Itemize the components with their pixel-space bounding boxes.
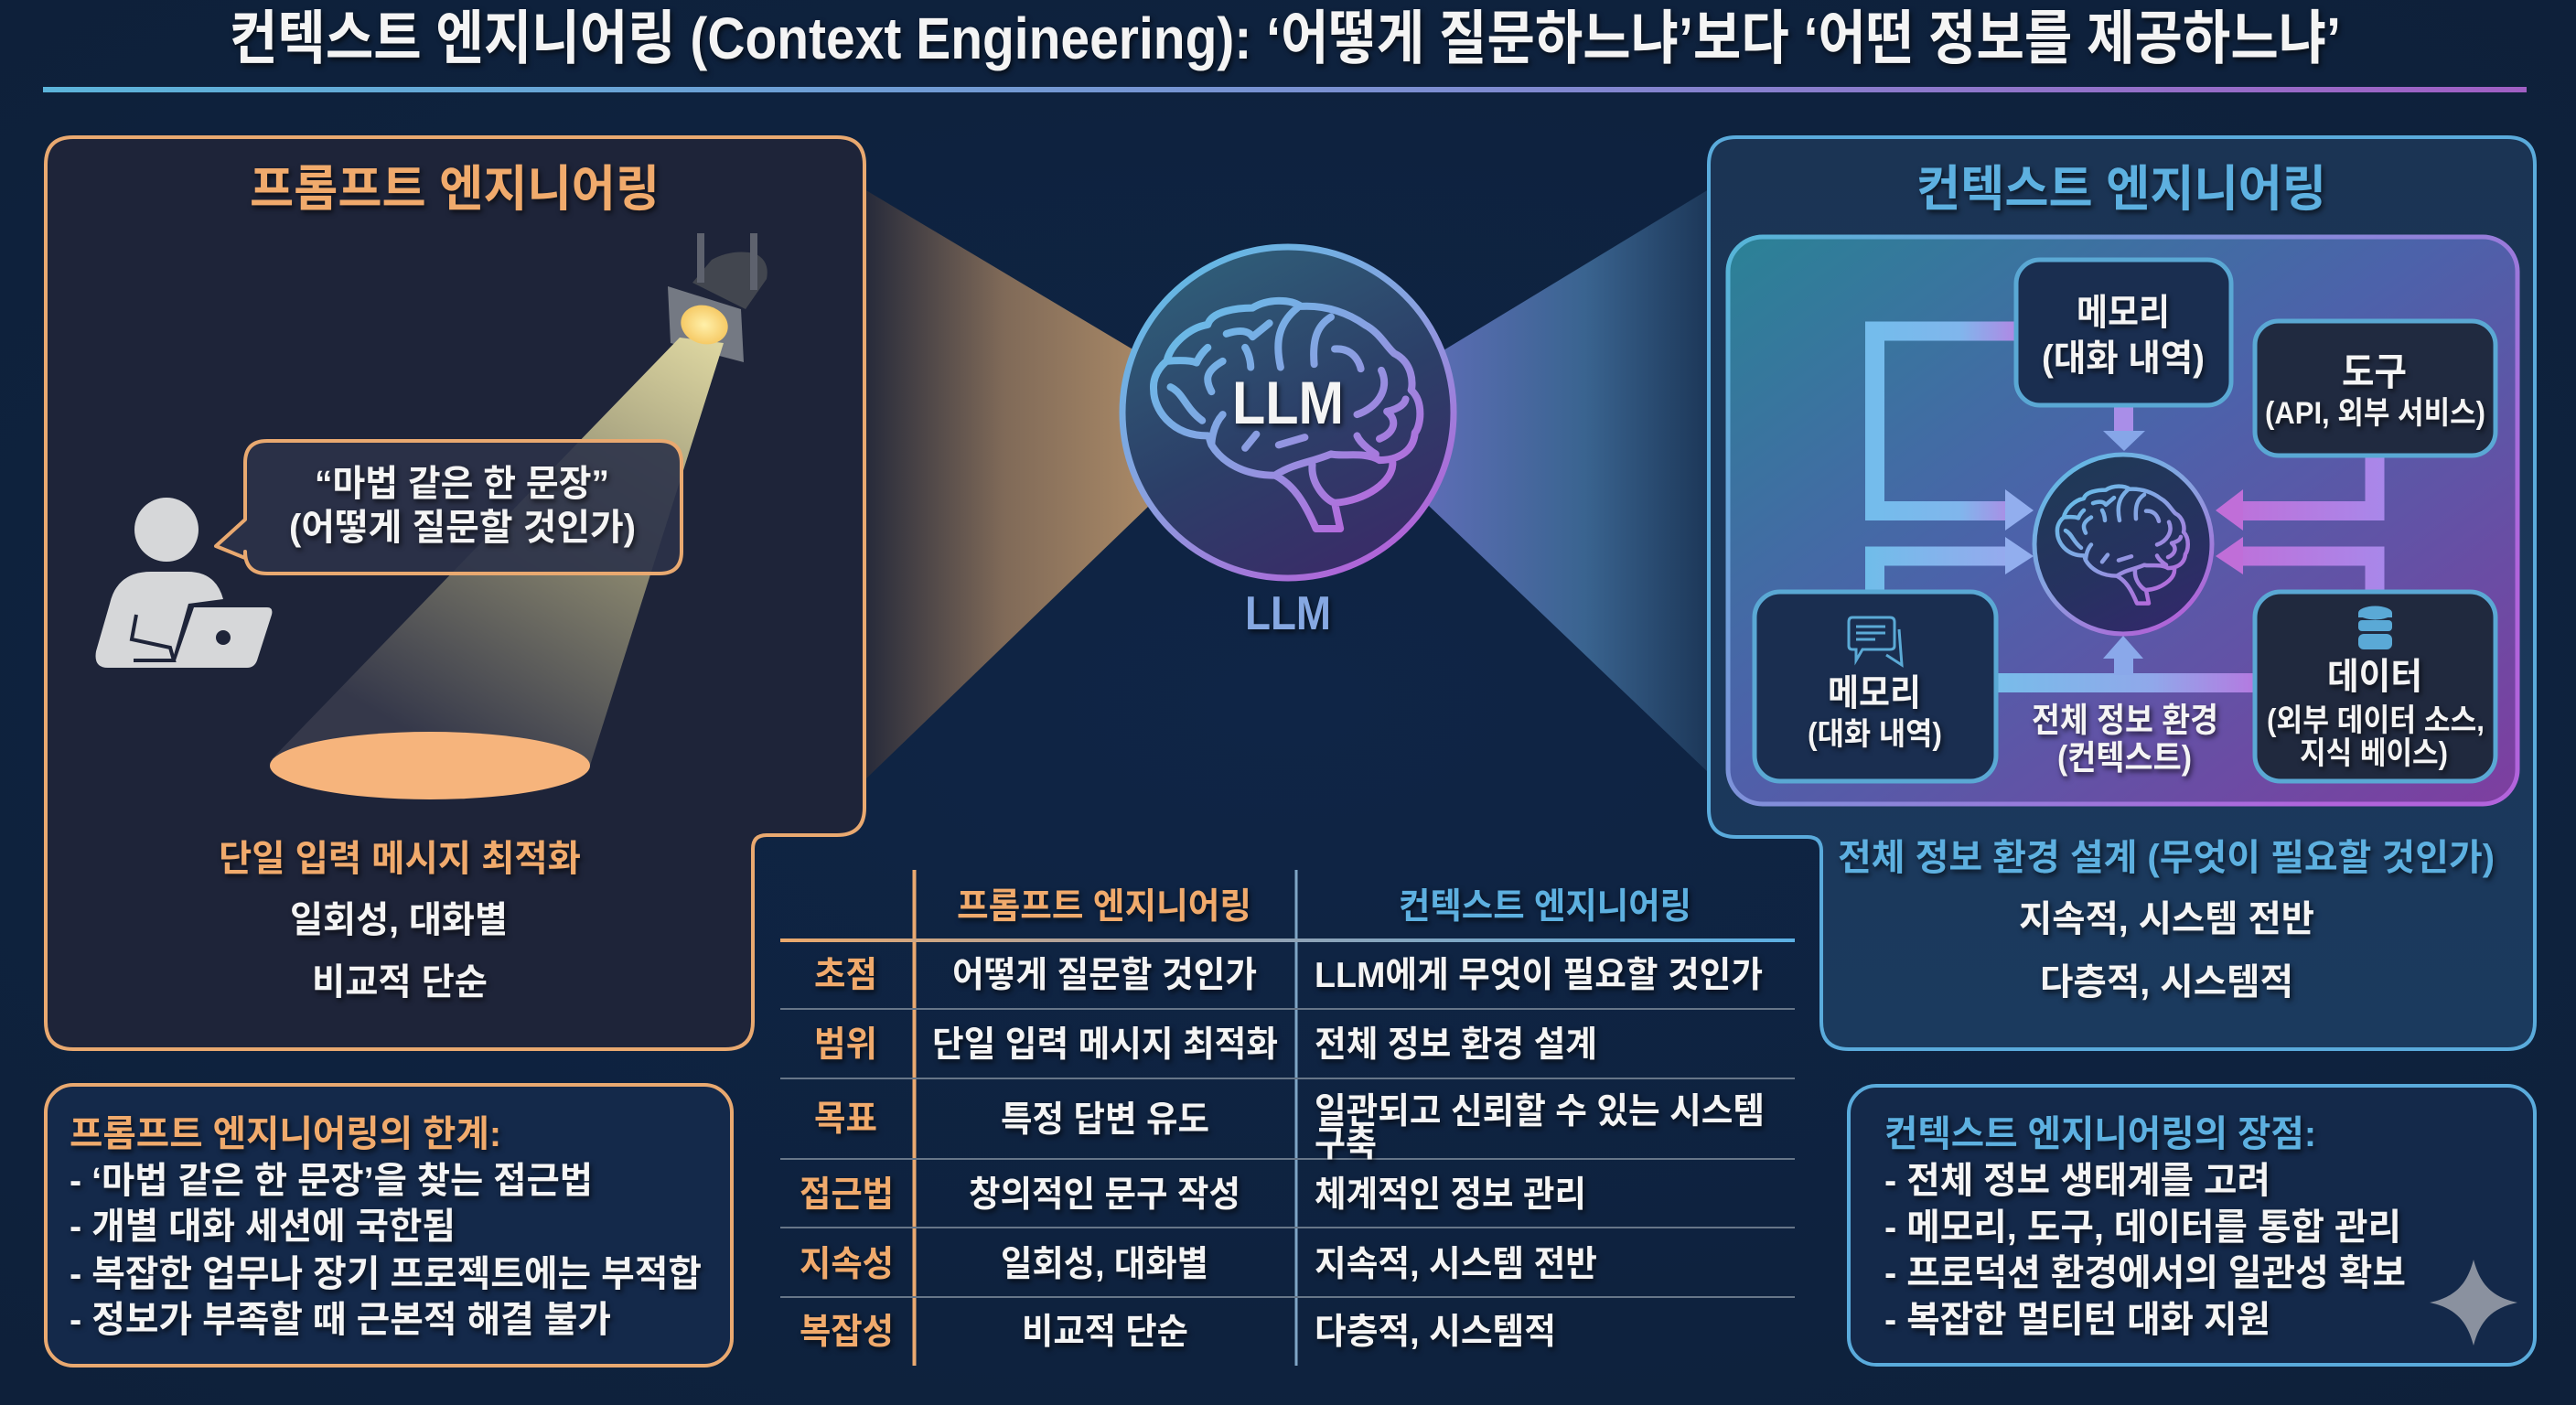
text: whole information environment: (컨텍스트) xyxy=(2057,739,2192,777)
panel: limits of prompt engineering: - 복잡한 업무나 장기 프로젝트에는 부적합 xyxy=(70,1254,702,1294)
panel: limits of prompt engineering: - ‘마법 같은 한 문장’을 찾는 접근법 xyxy=(70,1161,593,1201)
box: data: 지식 베이스) xyxy=(2300,736,2448,771)
row: persistence: 지속성 xyxy=(800,1245,894,1284)
box: tools: (API, 외부 서비스) xyxy=(2265,396,2485,431)
box: memory bottom xyxy=(1755,592,1996,781)
row: approach: 체계적인 정보 관리 xyxy=(1315,1175,1586,1215)
box: tools: 도구 xyxy=(2342,350,2407,393)
icon: database xyxy=(2358,606,2392,649)
row: persistence xyxy=(800,1245,1597,1284)
panel: limits of prompt engineering: - 개별 대화 세션에 국한됨 xyxy=(70,1207,456,1247)
panel: context engineering xyxy=(1709,137,2535,1049)
text: simple: 비교적 단순 xyxy=(312,962,488,1003)
row: goal: 일관되고 신뢰할 수 있는 시스템 xyxy=(1315,1092,1765,1132)
box: data xyxy=(2255,592,2496,781)
panel: benefits of context engineering: - 메모리, 도구, 데이터를 통합 관리 xyxy=(1884,1207,2401,1248)
arrow: top memory to left xyxy=(1875,331,2034,531)
callout: speech bubble: “마법 같은 한 문장” xyxy=(315,464,609,504)
row: approach: 창의적인 문구 작성 xyxy=(969,1175,1240,1215)
panel: benefits of context engineering: - 전체 정보 생태계를 고려 xyxy=(1884,1161,2270,1201)
row: goal: 목표 xyxy=(814,1099,877,1139)
row: scope: 범위 xyxy=(814,1025,877,1065)
box: data: 데이터 xyxy=(2327,657,2422,697)
panel: limits of prompt engineering: - 정보가 부족할 때 근본적 해결 불가 xyxy=(70,1300,611,1340)
table header: 컨텍스트 엔지니어링 xyxy=(1399,887,1691,927)
arrow: tools xyxy=(2216,456,2375,531)
arrow: top down to brain xyxy=(2103,405,2145,451)
diagram: information environment xyxy=(1728,237,2517,804)
row: focus: LLM에게 무엇이 필요할 것인가 xyxy=(1315,956,1763,995)
panel: benefits of context engineering: - 프로덕션 환경에서의 일관성 확보 xyxy=(1884,1253,2406,1293)
row: complexity: 복잡성 xyxy=(800,1313,894,1352)
text: multilayer: 다층적, 시스템적 xyxy=(2040,962,2293,1003)
row: focus: 어떻게 질문할 것인가 xyxy=(952,956,1257,995)
table header: 프롬프트 엔지니어링 xyxy=(957,887,1251,927)
box: memory top xyxy=(2016,260,2231,405)
row: scope: 단일 입력 메시지 최적화 xyxy=(932,1025,1278,1065)
cone: right light beam toward LLM xyxy=(1429,189,1709,773)
row: goal: 특정 답변 유도 xyxy=(1001,1100,1209,1140)
icon: spotlight xyxy=(270,233,767,799)
icon: person at laptop xyxy=(96,498,272,668)
title: 컨텍스트 엔지니어링 (Context Engineering): ‘어떻게 질문하느냐’보다 ‘어떤 정보를 제공하느냐’ xyxy=(230,5,2341,71)
row: persistence: 일회성, 대화별 xyxy=(1001,1245,1208,1284)
row: complexity: 다층적, 시스템적 xyxy=(1315,1313,1556,1352)
text: whole information environment: 전체 정보 환경 xyxy=(2032,702,2218,739)
panel: benefits of context engineering xyxy=(1849,1086,2535,1365)
icon: small brain circle xyxy=(2034,455,2212,634)
arrow: data xyxy=(2216,537,2375,592)
icon: LLM brain circle xyxy=(1122,247,1454,578)
text: one-off: 일회성, 대화별 xyxy=(290,900,508,940)
panel: limits of prompt engineering: 프롬프트 엔지니어링의 한계: xyxy=(70,1114,501,1154)
row: focus: 초점 xyxy=(814,956,877,995)
row: persistence: 지속적, 시스템 전반 xyxy=(1315,1245,1597,1284)
box: memory top: (대화 내역) xyxy=(2042,338,2205,379)
callout: speech bubble: (어떻게 질문할 것인가) xyxy=(289,508,636,548)
row: complexity: 비교적 단순 xyxy=(1022,1313,1188,1352)
box: tools xyxy=(2255,321,2496,456)
icon: chat bubbles xyxy=(1849,617,1902,665)
row: approach: 접근법 xyxy=(800,1175,894,1215)
panel: benefits of context engineering: 컨텍스트 엔지니어링의 장점: xyxy=(1884,1114,2316,1154)
arrow: bottom up to brain xyxy=(1997,636,2255,692)
panel: benefits of context engineering: - 복잡한 멀티턴 대화 지원 xyxy=(1884,1300,2270,1340)
icon: LLM brain circle: LLM xyxy=(1232,369,1344,436)
text: persistent: 지속적, 시스템 전반 xyxy=(2019,899,2314,939)
row: goal: 구축 xyxy=(1315,1125,1377,1164)
text: whole information environment xyxy=(2032,702,2218,777)
panel: prompt engineering xyxy=(46,137,864,1049)
row: focus xyxy=(814,956,1763,995)
heading: context engineering: 컨텍스트 엔지니어링 xyxy=(1916,162,2326,217)
cone: left light beam toward LLM xyxy=(864,189,1149,780)
panel: limits of prompt engineering xyxy=(46,1085,732,1366)
row: approach xyxy=(800,1175,1586,1215)
box: data: (외부 데이터 소스, xyxy=(2267,703,2485,738)
heading: prompt engineering: 프롬프트 엔지니어링 xyxy=(250,162,660,217)
callout: speech bubble xyxy=(216,441,682,574)
table header xyxy=(957,887,1691,927)
text: single message: 단일 입력 메시지 최적화 xyxy=(219,839,581,879)
row: complexity xyxy=(800,1313,1556,1352)
arrow: bottom memory up xyxy=(1875,537,2034,592)
box: memory bottom: (대화 내역) xyxy=(1808,717,1942,752)
icon: sparkle xyxy=(2430,1260,2517,1346)
table: comparison xyxy=(780,870,1795,1366)
row: goal xyxy=(814,1092,1765,1164)
text: whole environment design: 전체 정보 환경 설계 (무엇이 필요할 것인가) xyxy=(1838,838,2495,878)
row: scope: 전체 정보 환경 설계 xyxy=(1315,1025,1597,1065)
box: memory top: 메모리 xyxy=(2077,293,2170,333)
label: LLM: LLM xyxy=(1245,587,1331,640)
row: scope xyxy=(814,1025,1597,1065)
box: memory bottom: 메모리 xyxy=(1828,673,1921,713)
